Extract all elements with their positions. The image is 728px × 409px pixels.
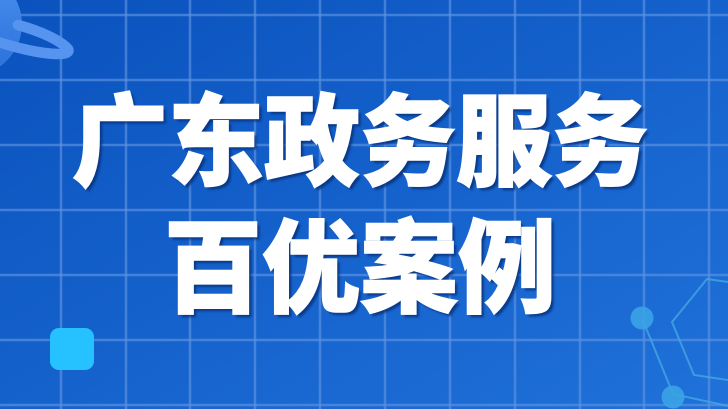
title line 2: 百优案例 bbox=[164, 212, 556, 326]
icon: network nodes bbox=[630, 279, 728, 408]
icon: planet with ring bbox=[0, 0, 68, 76]
title line 1: 广东政务服务 bbox=[72, 88, 648, 199]
icon: cyan rounded square bbox=[50, 328, 94, 370]
